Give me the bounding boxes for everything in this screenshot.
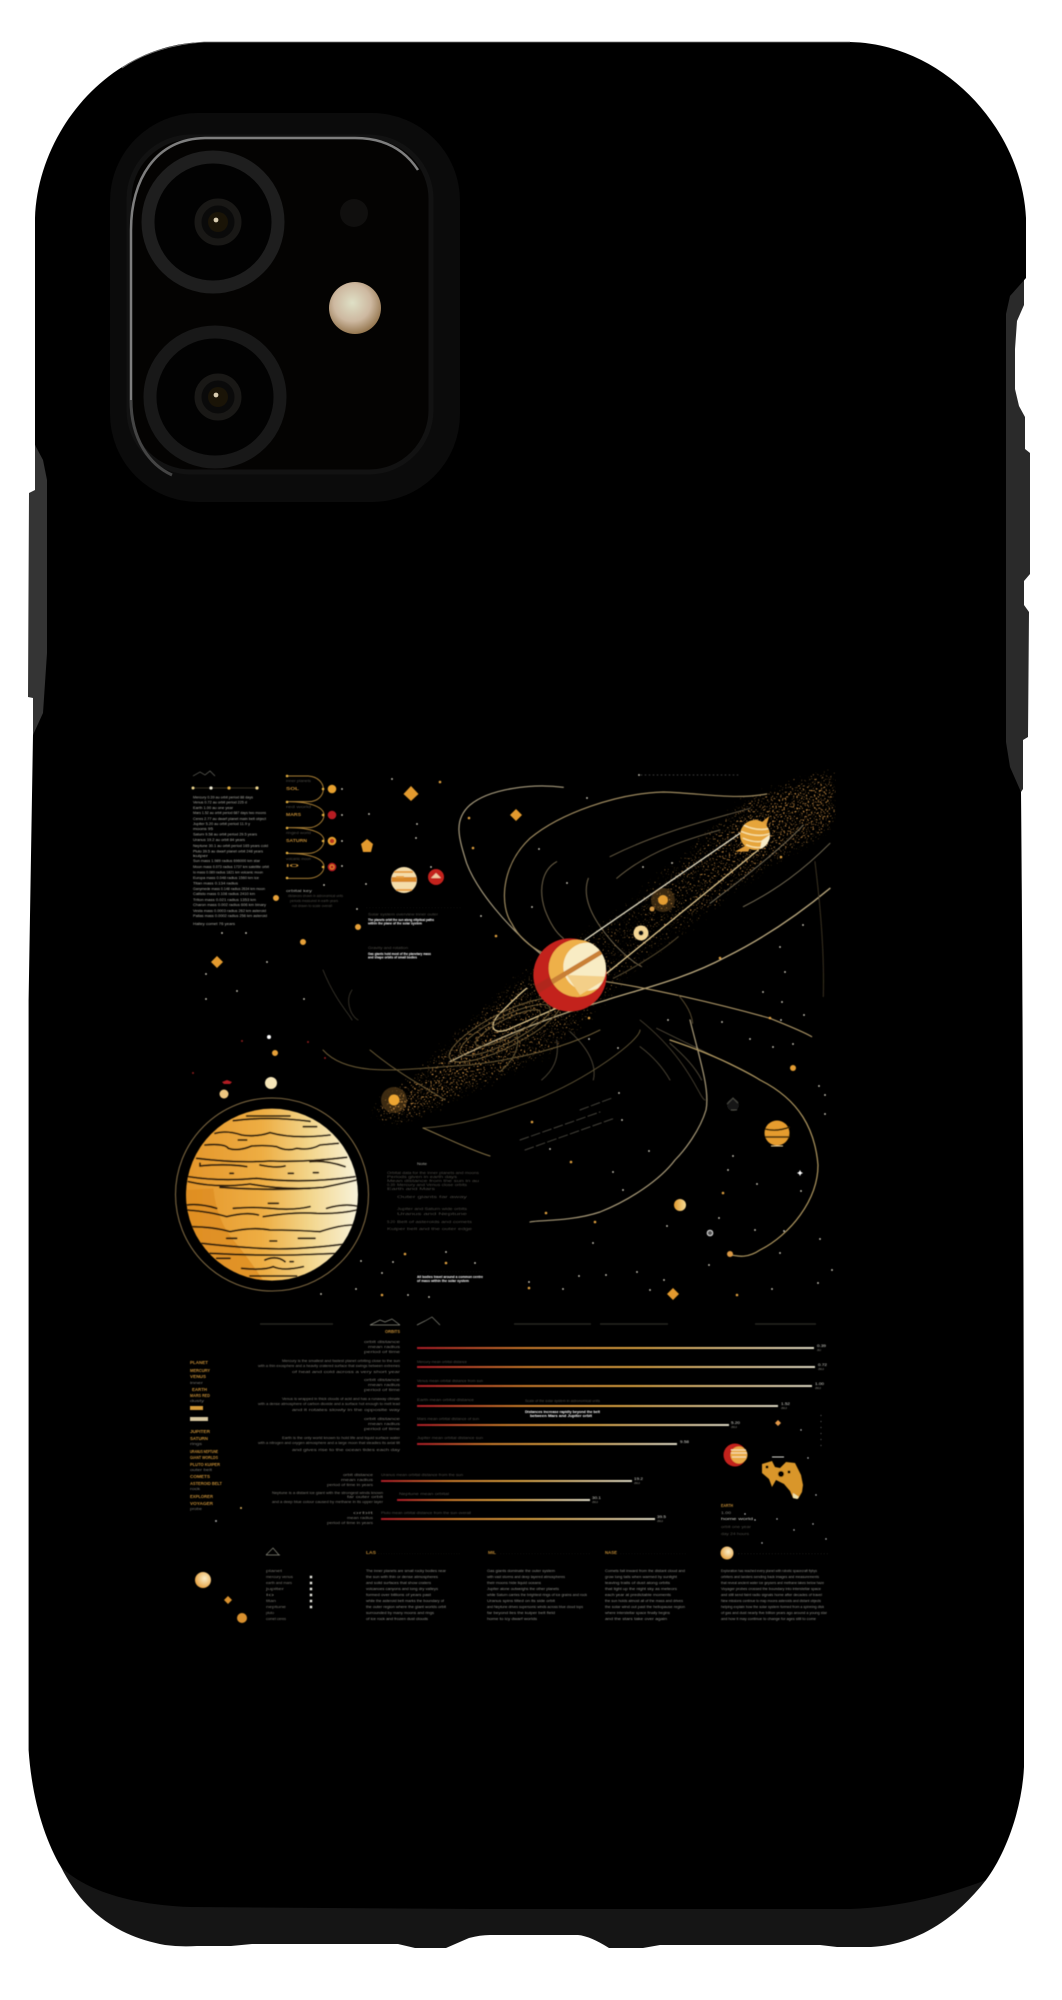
dotted scale columns — [821, 1415, 868, 1535]
lower lens — [150, 332, 280, 462]
list rows: Mars 1.52 au orbit period 687 days two moons — [193, 811, 266, 815]
column one text: and solid surfaces that show craters — [366, 1581, 431, 1585]
bar end values: au — [657, 1519, 663, 1523]
bar captions: Earth mean orbital distance — [417, 1398, 474, 1402]
mid note text — [387, 1162, 483, 1283]
column one text: the outer region where the giant worlds orbit — [366, 1605, 446, 1609]
key labels: distances shown in astronomical units — [288, 894, 343, 898]
upper white captions: Solar system overview inner outer — [368, 912, 439, 916]
mid note text: Outer giants far away — [397, 1195, 468, 1199]
bar end values: 9.58 — [680, 1440, 689, 1444]
bar end values: au — [592, 1500, 598, 1504]
Jupiter ring — [176, 1098, 368, 1291]
small gold planet — [720, 1546, 734, 1560]
list rows: Ceres 2.77 au dwarf planet main belt object — [193, 817, 266, 821]
right aligned text blocks: mean radius — [368, 1345, 400, 1349]
list rows: Pluto 39.5 au dwarf planet orbit 248 years — [193, 850, 263, 854]
left gold labels column: JUPITER — [190, 1429, 211, 1434]
orbit lines — [450, 786, 830, 1080]
mid note text: All bodies travel around a common centre — [417, 1275, 483, 1279]
bars — [381, 1347, 815, 1520]
left gold labels column: rock — [190, 1487, 200, 1491]
column one text: while the asteroid belt marks the boundary of — [366, 1599, 444, 1603]
list rows: Uranus 19.2 au orbit 84 years — [193, 838, 245, 842]
world caption: orbit one year — [721, 1525, 752, 1529]
column three text: that light up the night sky as meteors — [605, 1587, 677, 1591]
galaxy dust band — [372, 769, 836, 1125]
Jupiter planet — [186, 1109, 358, 1281]
column headers: . . . . . . . . . . . . . . . . . . . . . . . . — [620, 1551, 686, 1555]
right aligned text blocks: orbit — [353, 1511, 373, 1515]
table rows: jupiter — [264, 1587, 286, 1591]
right aligned text blocks: orbit distance — [364, 1417, 400, 1421]
table rows: titan — [266, 1599, 276, 1603]
right aligned text blocks: Earth is the only world known to hold life and liquid surface water — [282, 1436, 401, 1440]
table markers — [310, 1577, 312, 1607]
bar captions: Scale of the solar system in astronomical units — [525, 1399, 600, 1403]
right aligned text blocks: with a thin exosphere and a heavily cratered surface that swings between extremes — [258, 1364, 400, 1368]
list rows — [193, 796, 269, 926]
column four text: of gas and dust nearly five billion years ago around a young star — [721, 1611, 828, 1615]
list rows: Triton mass 0.021 radius 1353 km — [193, 898, 256, 902]
column four text: and still send faint radio signals home after decades of travel — [721, 1593, 822, 1597]
bar end values: au — [731, 1425, 737, 1429]
bar captions: Uranus mean orbital distance from the sun — [381, 1473, 463, 1477]
right aligned text blocks: and a deep blue colour caused by methane in its upper layer — [272, 1500, 384, 1504]
list rows: Titan mass 0.134 radius — [193, 882, 238, 886]
big red and cream planet — [530, 938, 611, 1012]
bar captions: Pluto mean orbital distance from the sun overall — [381, 1511, 471, 1515]
bottom left table — [264, 1569, 311, 1621]
list rows: Halley comet 76 years — [193, 922, 235, 926]
key labels: ringed world — [286, 831, 311, 835]
column two text: Jupiter alone outweighs the other planets — [487, 1587, 559, 1591]
column four text: helping explain how the solar system formed from a spinning disk — [721, 1605, 824, 1609]
column three text — [605, 1569, 685, 1621]
right aligned text blocks: orbit distance — [364, 1340, 400, 1344]
upper lens — [148, 157, 278, 287]
world caption: home world — [721, 1517, 753, 1521]
list rows: Europa mass 0.048 radius 1560 km ice — [193, 876, 259, 880]
small diamond markers — [211, 786, 679, 1300]
right aligned text blocks: mean radius — [368, 1383, 400, 1387]
column four text: Voyager probes crossed the boundary into interstellar space — [721, 1587, 821, 1591]
list rows: Saturn 9.58 au orbit period 29.5 years — [193, 832, 257, 836]
red cream planet — [724, 1444, 748, 1466]
list rows: Moon mass 0.073 radius 1737 km satellite orbit — [193, 865, 269, 869]
column two text: and Neptune drives supersonic winds across blue cloud tops — [487, 1605, 583, 1609]
list rows: Jupiter 5.20 au orbit period 11.9 y — [193, 822, 250, 826]
left gold labels column: PLANET — [190, 1360, 208, 1365]
right aligned text blocks: and it rotates slowly in the opposite way — [292, 1408, 401, 1412]
column two text: Uranus spins tilted on its side orbit — [487, 1599, 555, 1603]
key labels: not drawn to scale overall — [292, 904, 332, 908]
bar captions — [381, 1360, 601, 1515]
upper white captions: The planets orbit the sun along elliptical paths — [368, 918, 434, 922]
right aligned text blocks: mean radius — [341, 1478, 373, 1482]
column three text: Comets fall inward from the distant cloud and — [605, 1569, 685, 1573]
planet key brackets — [286, 776, 343, 908]
mid note text: Jupiter and Saturn wide orbits — [397, 1207, 467, 1211]
right aligned text blocks: with a dense atmosphere of carbon dioxide and a surface hot enough to melt lead — [258, 1402, 400, 1406]
header mountain sketches — [266, 1317, 440, 1555]
right aligned text blocks: Neptune is a distant ice giant with the strongest winds known — [272, 1491, 383, 1495]
dark moon — [727, 1098, 739, 1111]
left gold labels column: MERCURY — [190, 1368, 210, 1373]
list rows: Ganymede mass 0.148 radius 2634 km moon — [193, 887, 265, 891]
left gold labels column: PLUTO KUIPER — [190, 1462, 221, 1467]
list rows: Callisto mass 0.108 radius 2410 km — [193, 892, 255, 896]
column two text: their moons hide liquid oceans — [487, 1581, 541, 1585]
right aligned text blocks: period of time in years — [327, 1521, 373, 1525]
bar end values: au — [818, 1367, 824, 1371]
column one text: The inner planets are small rocky bodies near — [366, 1569, 447, 1573]
upper white captions: . . . . . . . . . . . . . . . . . . . . . . . . . . . . . . . — [366, 905, 461, 909]
right aligned text blocks: Venus is wrapped in thick clouds of acid and has a runaway climate — [282, 1397, 400, 1401]
table rows: io — [266, 1593, 274, 1597]
right aligned text blocks: orbit distance — [343, 1473, 373, 1477]
column one text: volcanoes canyons and long dry valleys — [366, 1587, 438, 1591]
right aligned text blocks: of heat and cold across a very short year — [292, 1370, 402, 1374]
right aligned text blocks: and gives rise to the ocean tides each day — [292, 1448, 401, 1452]
key labels — [286, 779, 343, 908]
space artwork print — [176, 750, 868, 1623]
bar captions: Jupiter mean orbital distance sun — [417, 1436, 483, 1440]
right aligned text blocks: orbit distance — [364, 1378, 400, 1382]
right aligned text blocks: mean radius — [368, 1422, 400, 1426]
small diamond — [775, 1420, 781, 1426]
mid note text: 5.20 — [387, 1220, 395, 1224]
key labels: periods measured in earth years — [290, 899, 338, 903]
small planets near Jupiter — [220, 1035, 277, 1098]
list rows: Neptune 30.1 au orbit period 165 years cold — [193, 844, 268, 848]
world caption: 1.00 — [721, 1511, 731, 1515]
column two text: far beyond lies the kuiper belt field — [487, 1611, 555, 1615]
upper white captions — [367, 912, 438, 960]
bar end values: 39.5 — [657, 1515, 666, 1519]
column headers: NASE — [605, 1550, 617, 1555]
column one text: formed over billions of years past — [366, 1593, 431, 1597]
galaxy rings — [448, 998, 560, 1064]
column two text — [487, 1569, 587, 1621]
bar end values: 19.2 — [634, 1477, 643, 1481]
table rows: planet — [266, 1569, 282, 1573]
column one text — [366, 1569, 447, 1621]
table rows: pluto — [266, 1611, 274, 1615]
right aligned text blocks: with a nitrogen and oxygen atmosphere and a large moon that steadies its axial tilt — [258, 1441, 400, 1445]
mid note text: Periods given in earth days — [387, 1175, 458, 1179]
flash — [329, 282, 381, 334]
key labels: orbital key — [286, 889, 312, 893]
bar captions: between Mars and Jupiter orbit — [530, 1414, 593, 1418]
column headers: MIL — [488, 1550, 496, 1555]
left gold labels column: VENUS — [190, 1374, 206, 1379]
mid note text: Uranus and Neptune — [397, 1212, 467, 1216]
list rows: Sun mass 1.989 radius 696000 km star — [193, 859, 261, 863]
column four text: that reveal ancient water ice geysers and methane lakes below haze — [721, 1581, 824, 1585]
bar captions: Venus mean orbital distance from sun — [417, 1379, 483, 1383]
table rows: comet ceres — [266, 1617, 286, 1621]
left gold labels column: SATURN — [190, 1436, 209, 1441]
red planet top — [428, 869, 444, 885]
bar end values: au — [781, 1406, 787, 1410]
column two text: with vast storms and deep layered atmospheres — [487, 1575, 565, 1579]
case top edge highlight — [122, 42, 850, 68]
left gold labels column: MARS RED — [190, 1393, 211, 1398]
list rows: Venus 0.72 au orbit period 225 d — [193, 800, 247, 804]
column three text: and the stars take over again — [605, 1617, 667, 1621]
column headers: LAS — [366, 1550, 376, 1555]
mid note text: Earth and Mars — [387, 1187, 436, 1191]
bar end values: 0.39 — [817, 1344, 826, 1348]
left gold labels column: rings — [190, 1442, 202, 1446]
bar captions: Mars mean orbital distance of sun — [417, 1417, 479, 1421]
right aligned text blocks: mean radius — [347, 1516, 373, 1520]
column four text: orbiters and landers sending back images and measurements — [721, 1575, 819, 1579]
list rows: moons 95 — [193, 827, 213, 831]
mid note text: Note — [417, 1162, 427, 1166]
list rows: Io mass 0.089 radius 1821 km volcanic moon — [193, 870, 263, 874]
list rows: kuiper — [193, 854, 209, 858]
column four text: Exploration has reached every planet with robotic spacecraft flybys — [721, 1569, 817, 1573]
column two text: while Saturn carries the brightest rings of ice grains and rock — [487, 1593, 587, 1597]
mid note text: Orbital data for the inner planets and moons — [387, 1171, 479, 1175]
column headers — [366, 1550, 828, 1555]
left side button — [28, 445, 50, 735]
column three text: each year at predictable moments — [605, 1593, 671, 1597]
list rows: Charon mass 0.002 radius 606 km binary — [193, 903, 266, 907]
right aligned text blocks: Mercury is the smallest and fastest planet orbiting close to the sun — [282, 1359, 400, 1363]
list rows: Vesta mass 0.0003 radius 262 km asteroid — [193, 909, 266, 913]
camera module — [110, 113, 460, 502]
column headers: . . . . . . . . . . . . . . . . . . . . . . . . . . . . . . . . — [500, 1551, 590, 1555]
column three text: where interstellar space finally begins — [605, 1611, 670, 1615]
mid note text: of mass within the solar system — [417, 1279, 469, 1283]
mid note text: Belt of asteroids and comets — [397, 1220, 473, 1224]
column one text: the sun with thin or dense atmospheres — [366, 1575, 438, 1579]
ring eye planet — [634, 926, 648, 940]
table rows: neptune — [266, 1605, 286, 1609]
microphone — [340, 199, 368, 227]
small moon and ring dot — [674, 1065, 803, 1257]
left gold labels column: URANUS NEPTUNE — [190, 1449, 218, 1454]
right aligned text blocks — [258, 1329, 402, 1525]
mid note text: Mercury and Venus close orbits — [397, 1183, 467, 1187]
bar captions: Mercury mean orbital distance — [417, 1360, 467, 1364]
camera lower bezel highlight — [131, 400, 172, 475]
column three text: leaving trails of dust along orbits — [605, 1581, 670, 1585]
column three text: grow long tails when warmed by sunlight — [605, 1575, 677, 1579]
bar end values: 1.00 — [815, 1382, 824, 1386]
bar end values: 1.52 — [781, 1402, 790, 1406]
gold continent world — [762, 1457, 803, 1499]
camera housing — [110, 113, 460, 502]
left gold labels column: COMETS — [190, 1474, 210, 1479]
left gold labels column: VOYAGER — [190, 1501, 214, 1506]
list rows: Mercury 0.39 au orbit period 88 days — [193, 796, 253, 800]
key labels: red world — [286, 805, 311, 809]
left gold labels column: inner — [190, 1381, 204, 1385]
column one text: of ice rock and frozen dust clouds — [366, 1617, 428, 1621]
list rows: Earth 1.00 au one year — [193, 806, 234, 810]
planet with bands top — [391, 867, 417, 893]
column four text — [721, 1569, 828, 1621]
dust star cluster — [650, 888, 675, 912]
top left data list — [192, 771, 269, 926]
striped orange planet — [764, 1120, 790, 1146]
upper white captions: and shape orbits of small bodies — [368, 956, 417, 960]
upper white captions: Gravity and rotation — [368, 946, 408, 950]
right aligned text blocks: far outer orbit — [347, 1495, 383, 1499]
upper white captions: within the plane of the solar system — [367, 922, 422, 926]
mid note text: . . . . . . . . . . . . . . . . . . . . . . . — [417, 1269, 483, 1273]
dotted header — [192, 786, 259, 790]
key labels: SOL — [286, 786, 299, 791]
left gold labels column: GIANT WORLDS — [190, 1455, 218, 1460]
mid note text: Kuiper belt and the outer edge — [387, 1227, 472, 1231]
list rows: Pallas mass 0.0002 radius 256 km asteroid — [193, 914, 267, 918]
key planets — [287, 776, 336, 878]
bar end values: 5.20 — [731, 1421, 740, 1425]
planet stars — [745, 1430, 826, 1543]
left gold labels column: outer belt — [190, 1468, 212, 1472]
left gold labels column: ASTEROID BELT — [190, 1481, 222, 1486]
bar end values — [592, 1344, 827, 1523]
column two text: Gas giants dominate the outer system — [487, 1569, 555, 1573]
key labels: MARS — [286, 812, 301, 817]
column four text: and how it may continue to change for ages still to come — [721, 1617, 816, 1621]
world caption: EARTH — [721, 1503, 734, 1508]
right aligned text blocks: period of time — [364, 1350, 400, 1354]
key labels: inner planets — [286, 779, 311, 783]
left gold labels column: EXPLORER — [190, 1494, 214, 1499]
bracket curves — [287, 776, 324, 878]
table rows: mercury venus — [266, 1575, 293, 1579]
left gold labels column: EARTH — [192, 1387, 208, 1392]
column three text: the sun holds almost all of the mass and drives — [605, 1599, 683, 1603]
lower sweeping orbit lines — [323, 775, 818, 1256]
bar end values: au — [817, 1348, 821, 1352]
column four text: New missions continue to map moons asteroids and distant objects — [721, 1599, 821, 1603]
table rows — [264, 1569, 293, 1621]
column headers: . . . . . . . . . . . . . . . . . . . . . . . . . . . . . . — [738, 1551, 828, 1555]
left gold labels column: probe — [190, 1507, 202, 1511]
right aligned text blocks: ORBITS — [385, 1329, 400, 1334]
horizontal distance bar chart — [381, 1344, 827, 1523]
key labels: SATURN — [286, 838, 308, 843]
column headers: . . . . . . . . . . . . . . . . . . . . . . . . . . . . . . . . — [378, 1551, 460, 1555]
case back lip — [61, 1867, 986, 1948]
upper white captions: Gas giants hold most of the planetary mass — [368, 952, 431, 956]
mid note text: Mean distance from the sun in au — [387, 1179, 479, 1183]
column three text: the solar wind out past the heliopause region — [605, 1605, 685, 1609]
camera inner plate — [129, 137, 431, 472]
ringed planet upper right — [735, 816, 772, 852]
star field — [193, 775, 832, 1297]
world caption — [721, 1503, 753, 1536]
bar captions: Neptune mean orbital — [399, 1492, 449, 1496]
mountain sketch — [193, 771, 215, 776]
lower left dust cluster — [381, 1087, 407, 1113]
right aligned text blocks: period of time — [364, 1427, 400, 1431]
right aligned text blocks: period of time — [364, 1388, 400, 1392]
column two text: home to icy dwarf worlds — [487, 1617, 537, 1621]
left gold labels column — [190, 1360, 222, 1511]
bar end values: 0.72 — [818, 1363, 827, 1367]
camera bezel highlight — [131, 138, 418, 400]
bar captions: Distances increase rapidly beyond the belt — [525, 1410, 601, 1414]
column one text: surrounded by many moons and rings — [366, 1611, 434, 1615]
left gold labels column: dusty — [190, 1399, 205, 1403]
bar end values: au — [634, 1481, 640, 1485]
key labels: IO — [286, 863, 300, 868]
bar end values: au — [815, 1386, 821, 1390]
right aligned text blocks: period of time in years — [327, 1483, 373, 1487]
bottom left planets — [195, 1507, 247, 1623]
key labels: volcanic moon — [286, 857, 311, 861]
right side buttons — [1000, 278, 1030, 792]
table rows: earth and mars — [266, 1581, 292, 1585]
mid note text: 0.39 — [387, 1183, 395, 1187]
bar end values: 30.1 — [592, 1496, 601, 1500]
world caption: day 24 hours — [721, 1532, 749, 1536]
fading divider bars — [260, 1323, 816, 1325]
lower right planet group — [720, 1414, 828, 1560]
